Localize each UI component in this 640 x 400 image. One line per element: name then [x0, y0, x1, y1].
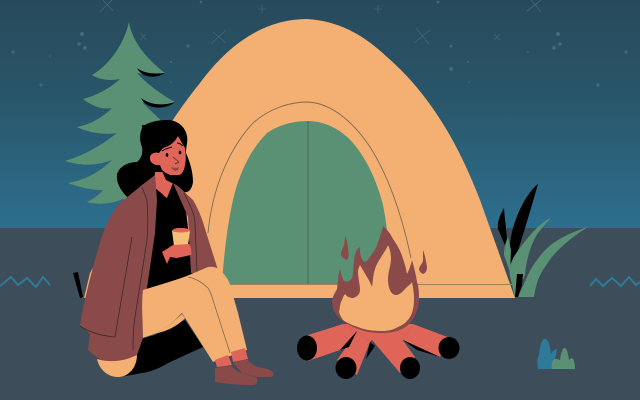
tent [84, 19, 515, 298]
black shirt [146, 183, 193, 290]
zigzag left [0, 277, 50, 287]
leg [142, 267, 247, 362]
door seam [307, 121, 309, 284]
rear shoe [233, 359, 273, 377]
face [150, 136, 186, 184]
hair [117, 120, 193, 200]
tent body [84, 19, 515, 298]
night sky [0, 0, 640, 229]
plants front: green blades [504, 218, 588, 297]
chin shadow [162, 171, 180, 184]
plants behind tent: dark blades [498, 184, 538, 270]
front shoe [215, 365, 257, 385]
knee line [188, 277, 230, 353]
hand [162, 244, 191, 264]
door arch line [208, 102, 411, 258]
flame outer [332, 226, 419, 333]
branch shadows [137, 68, 165, 77]
flame inner [339, 245, 414, 331]
pine tree [65, 22, 175, 215]
logs [297, 324, 460, 379]
spark right [419, 250, 427, 274]
zigzag right [590, 277, 640, 286]
rear leg dark [120, 320, 203, 377]
neck and chest [154, 172, 174, 198]
small bush [537, 339, 575, 369]
hip [97, 355, 137, 377]
floor line [215, 284, 513, 286]
under-thigh sliver [157, 314, 185, 333]
socks [215, 355, 232, 367]
jacket [80, 175, 218, 362]
spark left [341, 235, 349, 260]
woman [73, 120, 273, 385]
log strut [73, 272, 83, 298]
stars [11, 0, 628, 87]
ground [0, 228, 640, 400]
cup [172, 228, 190, 246]
campfire [297, 226, 460, 379]
tent door [222, 121, 392, 284]
